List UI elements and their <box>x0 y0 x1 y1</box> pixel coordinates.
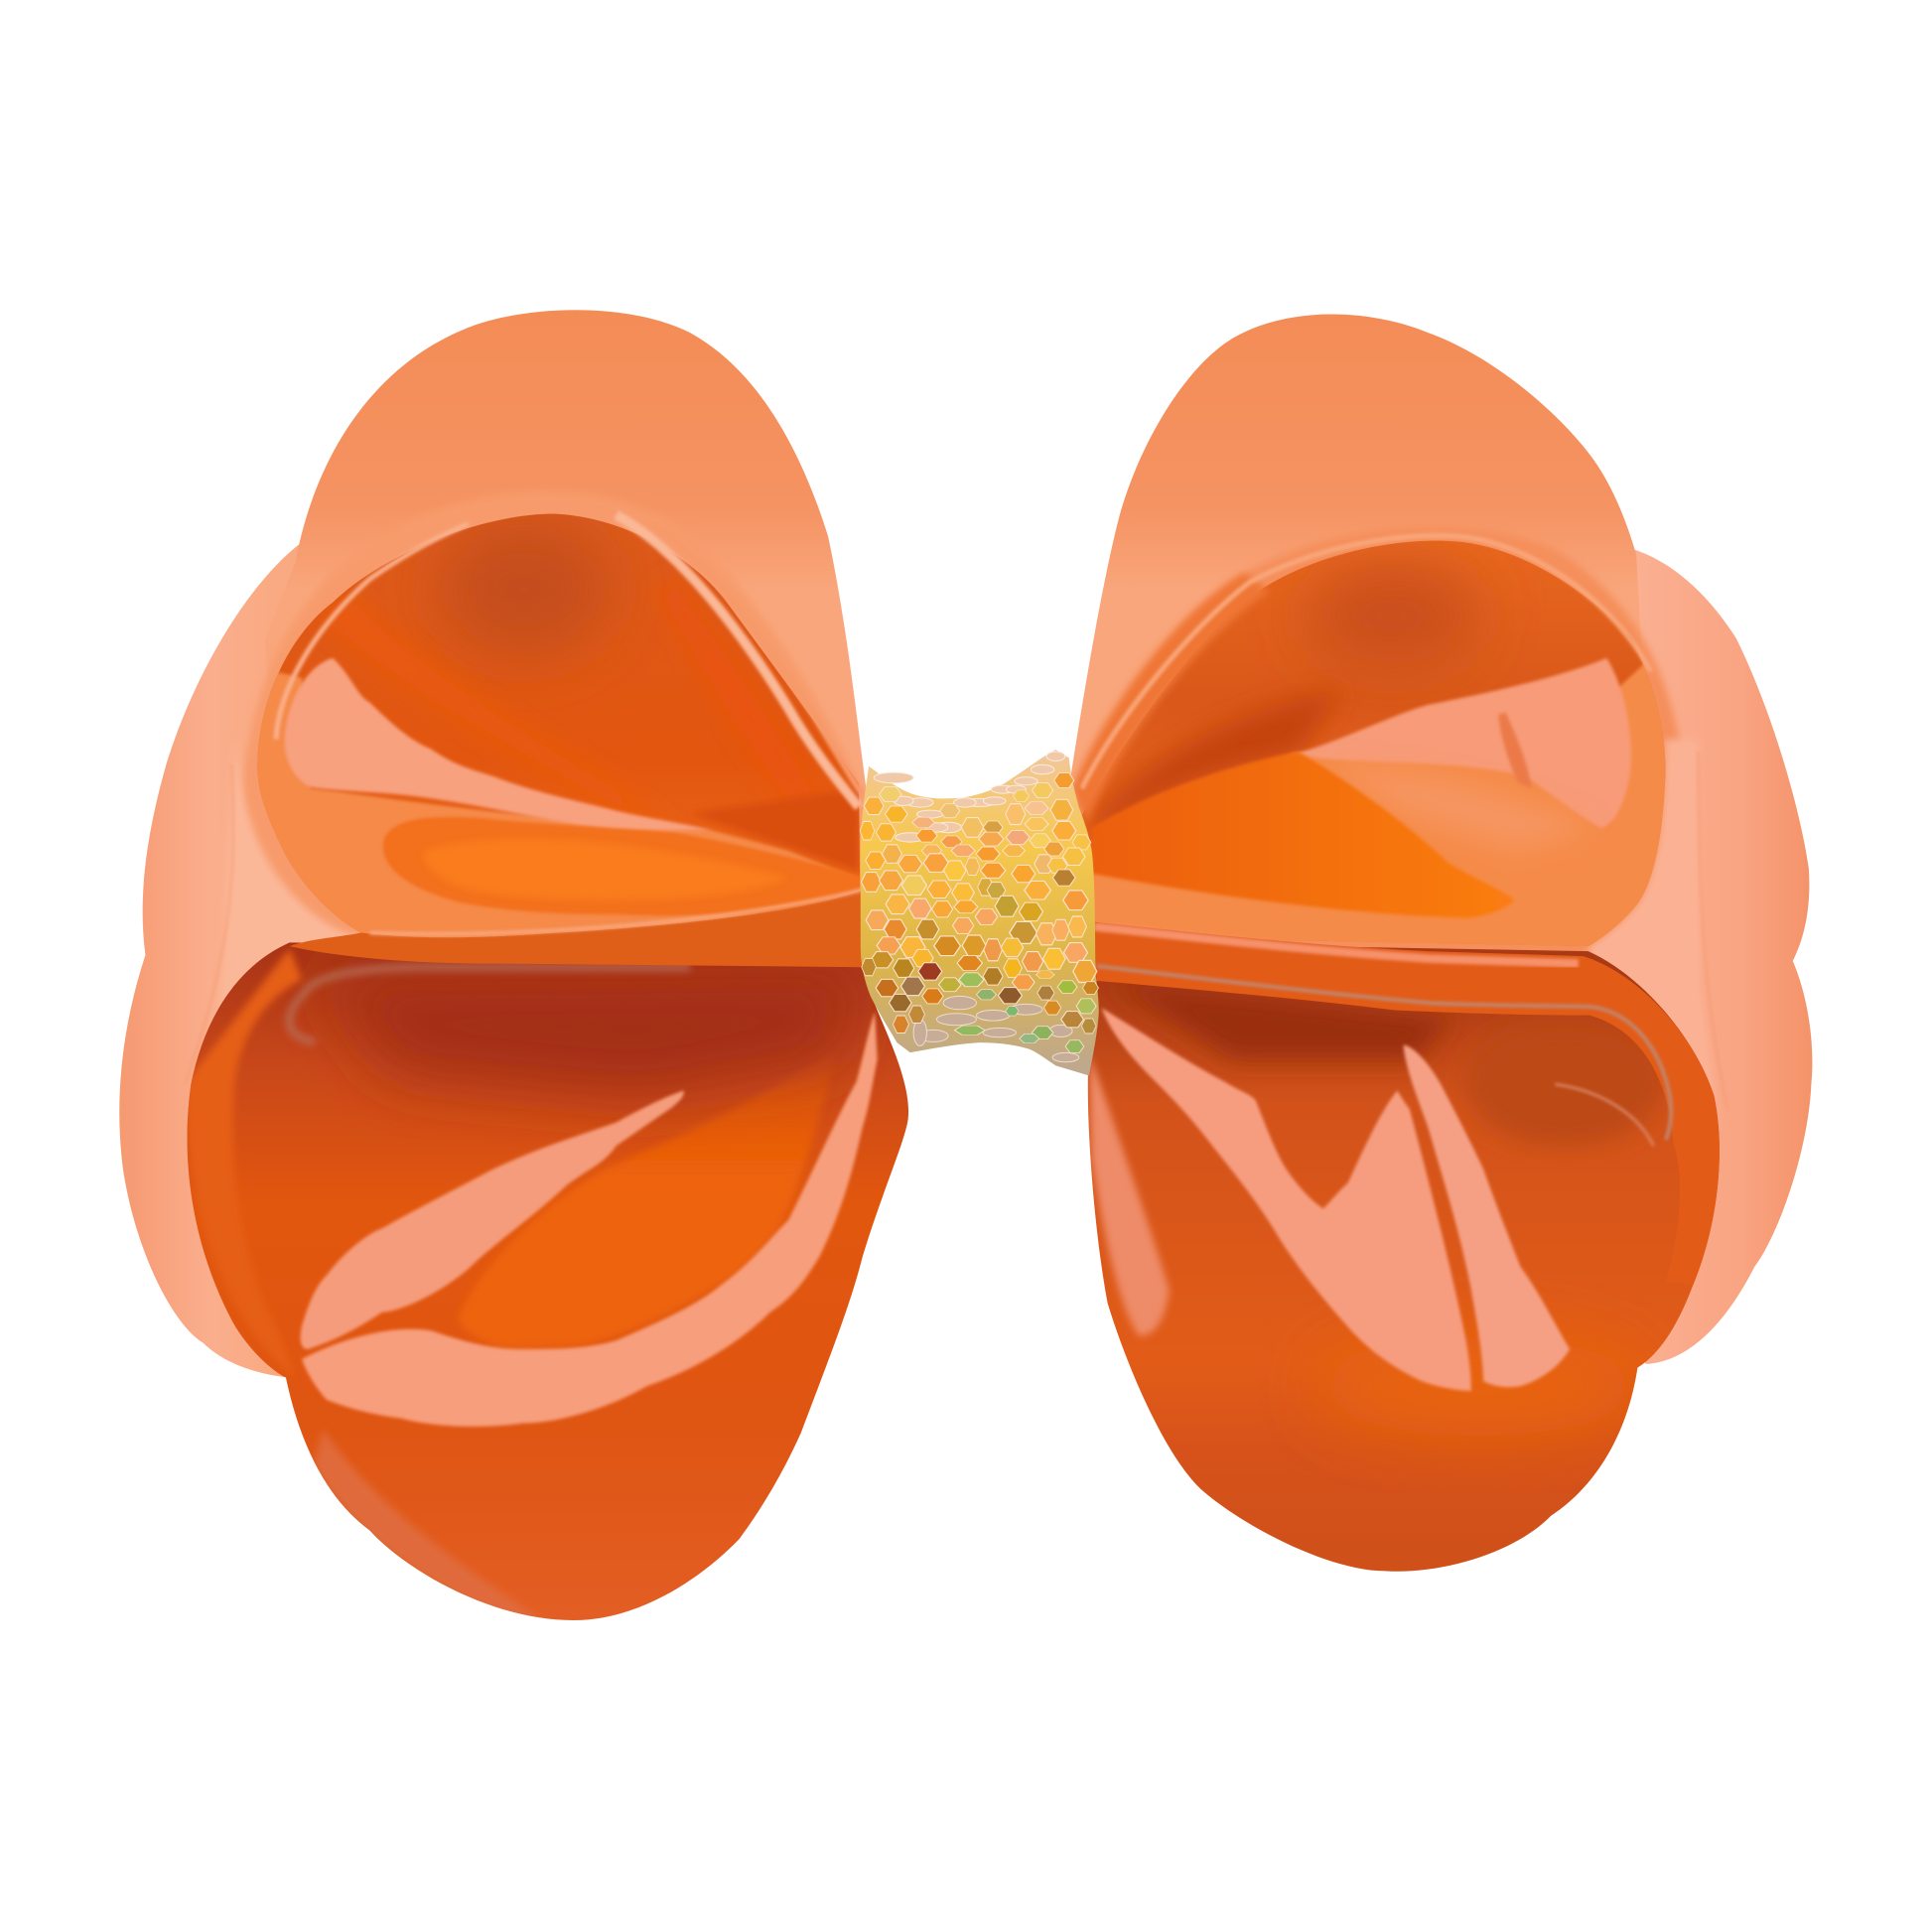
thin highlight lines along cavity edge <box>276 523 469 740</box>
right band edge line <box>1097 966 1671 1140</box>
small streak in reflection <box>1498 712 1532 788</box>
right side scalloped lobes <box>1355 550 1812 1364</box>
left lower petal <box>185 942 908 1620</box>
left horizontal fold band <box>290 890 865 967</box>
light orange lower zone <box>1084 634 1676 949</box>
right ridge around cavity <box>1077 527 1686 973</box>
dark region near knot <box>1089 690 1343 838</box>
right lower petal <box>1088 942 1720 1572</box>
left upper cavity <box>246 514 863 949</box>
peach reflection <box>1293 658 1631 828</box>
peach main reflection <box>1102 1008 1471 1391</box>
glitter hexagon sequins <box>860 773 1098 1052</box>
left side scalloped lobes <box>119 542 492 1378</box>
right pale fold <box>1588 740 1721 1133</box>
lower-left shadow <box>321 967 863 1097</box>
left ridge around cavity <box>239 491 866 936</box>
lighter fold at bottom <box>314 1430 542 1620</box>
right interior shade <box>1466 1023 1663 1146</box>
grey reflected edge line <box>289 967 690 1042</box>
silver lower flakes <box>913 996 1079 1062</box>
cavity shadow <box>1307 567 1478 665</box>
glow above bottom <box>1318 1337 1639 1436</box>
glitter base <box>861 750 1099 1075</box>
light orange lower zone <box>258 671 838 937</box>
illustration: orange patent bow with glitter centre <box>119 310 1813 1620</box>
left bow wing <box>119 310 866 1378</box>
right crease line <box>1698 752 1727 1109</box>
glossy orange blob <box>383 817 863 915</box>
lower-right shadow <box>1109 980 1453 1059</box>
peach reflection <box>285 658 712 830</box>
glitter centre knot <box>860 750 1099 1075</box>
peach streak highlight <box>301 1090 684 1349</box>
left upper back lobe <box>265 310 866 899</box>
left pale fold below cavity <box>211 740 359 1047</box>
right upper back lobe <box>1070 314 1657 949</box>
glossy orange patch <box>1092 752 1514 918</box>
left wall reflection <box>1089 1053 1170 1335</box>
top flat peach flakes <box>874 752 1065 842</box>
left band highlight <box>369 890 863 934</box>
cavity shadow <box>438 521 610 656</box>
curved glare at right <box>1555 1084 1654 1146</box>
bright orange patch <box>459 1047 838 1348</box>
right band gloss strip <box>1094 926 1579 964</box>
bright stripes in cavity <box>324 594 627 807</box>
orange ridge beside knot <box>1072 573 1269 823</box>
orange rim <box>185 949 302 1378</box>
right bow wing <box>1070 314 1812 1364</box>
left crease line <box>185 763 233 1084</box>
dark convergence near knot <box>690 788 859 873</box>
right horizontal fold band and outer rim <box>1092 921 1720 1285</box>
peach sweeping band <box>302 1012 878 1427</box>
peach second reflection <box>1404 1044 1570 1387</box>
ridge lines <box>1082 536 1651 788</box>
right upper cavity <box>1072 536 1676 949</box>
